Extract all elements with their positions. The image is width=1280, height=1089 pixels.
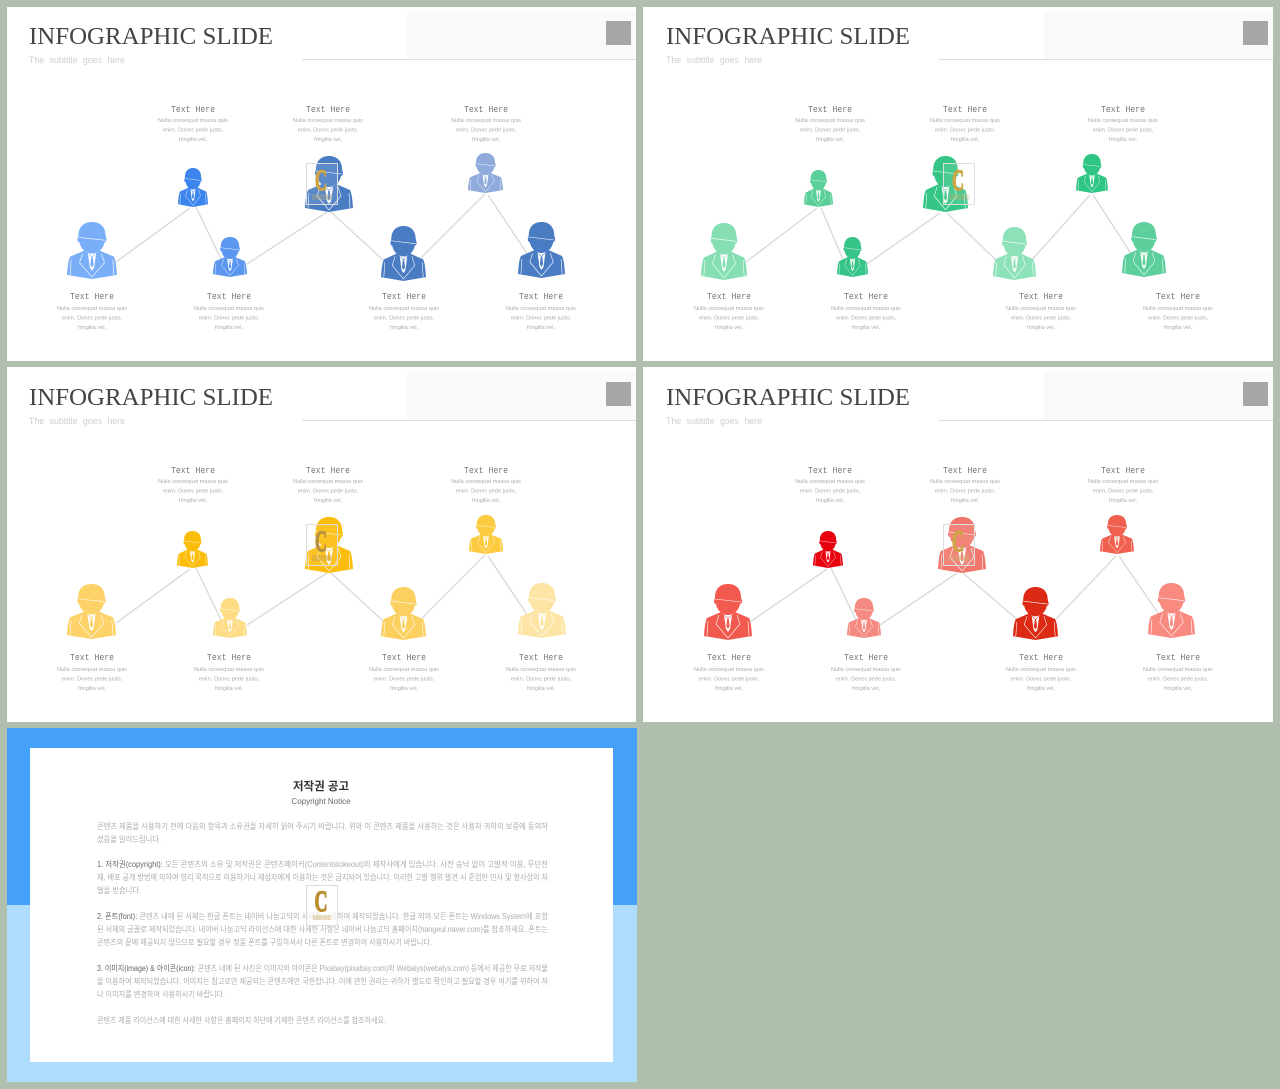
slide 1 labels: Nulla consequat massa quis <box>451 118 521 124</box>
slide 2 labels: fringilla vel, <box>816 137 844 143</box>
copyright heading <box>291 779 351 806</box>
slide 3 labels: Nulla consequat massa quis <box>293 479 363 485</box>
slide 1 header <box>29 11 636 65</box>
slide 1 labels: Text Here <box>207 291 251 302</box>
slide 2 labels: enim. Donec pede justo, <box>1011 316 1072 322</box>
slide 1 labels: Nulla consequat massa quis <box>506 306 576 312</box>
slide 2 labels: Nulla consequat massa quis <box>1088 118 1158 124</box>
slide 1 labels: fringilla vel, <box>390 325 418 331</box>
slide 3 labels: fringilla vel, <box>390 686 418 692</box>
slide 3 labels: Nulla consequat massa quis <box>451 479 521 485</box>
slide 1 labels: Nulla consequat massa quis <box>194 306 264 312</box>
slide 4 labels: enim. Donec pede justo, <box>699 676 760 682</box>
slide 2 labels: Text Here <box>1101 104 1145 115</box>
slide 2 labels: fringilla vel, <box>1164 325 1192 331</box>
slide 2 labels: enim. Donec pede justo, <box>699 316 760 322</box>
slide 4 labels: Nulla consequat massa quis <box>795 479 865 485</box>
copyright heading: Copyright Notice <box>291 797 351 806</box>
slide 2 person icons <box>701 154 1166 280</box>
slide 4 labels: Nulla consequat massa quis <box>694 667 764 673</box>
slide 3 labels: fringilla vel, <box>78 686 106 692</box>
slide 4 labels: fringilla vel, <box>1109 498 1137 504</box>
slide 4 labels: enim. Donec pede justo, <box>800 488 861 494</box>
slide 2 labels: Text Here <box>943 104 987 115</box>
slide 1 labels: Nulla consequat massa quis <box>293 118 363 124</box>
slide 4 header <box>666 372 1273 426</box>
slide 2 labels: enim. Donec pede justo, <box>800 128 861 134</box>
slide 4 labels: Text Here <box>844 652 888 663</box>
slide 4 labels: fringilla vel, <box>951 498 979 504</box>
copyright body text: 셨음을 알려드립니다. <box>97 834 161 844</box>
slide 3 labels: Text Here <box>70 652 114 663</box>
slide 2 labels <box>694 104 1213 331</box>
slide 3 labels: fringilla vel, <box>215 686 243 692</box>
copyright body text: 콘텐츠의 끝에 제공되지 않으므로 필요할 경우 정품 폰트를 구입하셔서 다른 폰트로 변경하여 사용하시기 바랍니다. <box>97 937 432 947</box>
slide 1 labels <box>57 104 576 331</box>
slide 1 labels: enim. Donec pede justo, <box>199 316 260 322</box>
slide 3 labels: enim. Donec pede justo, <box>456 488 517 494</box>
slide 3 labels <box>57 465 576 692</box>
slide 1 connecting lines <box>116 194 528 264</box>
slide 2 labels: Text Here <box>808 104 852 115</box>
slide 4 labels: Text Here <box>707 652 751 663</box>
slide 1 person icons <box>67 153 565 281</box>
slide 3 labels: Nulla consequat massa quis <box>369 667 439 673</box>
slide 4 header: INFOGRAPHIC SLIDE <box>666 385 910 411</box>
slide 4 labels: Text Here <box>1101 465 1145 476</box>
slide 4 labels: fringilla vel, <box>715 686 743 692</box>
copyright body text: 콘텐츠 제품을 사용하기 전에 다음의 항목과 소유권을 자세히 읽어 주시기 바랍니다. 위와 이 콘텐츠 제품을 사용하는 것은 사용자 귀하의 보증에 동의하 <box>97 821 549 831</box>
slide 2 labels: fringilla vel, <box>1027 325 1055 331</box>
slide 2 labels: enim. Donec pede justo, <box>935 128 996 134</box>
slide 4 connecting lines <box>750 556 1160 625</box>
slide 2 labels: Nulla consequat massa quis <box>930 118 1000 124</box>
slide 3 header <box>29 372 636 426</box>
slide 2 watermark: C <box>952 164 964 197</box>
slide 1 labels: enim. Donec pede justo, <box>511 316 572 322</box>
copyright body text: 벌을 받습니다. <box>97 885 141 895</box>
slide 3 labels: Nulla consequat massa quis <box>57 667 127 673</box>
slide 1 labels: Text Here <box>306 104 350 115</box>
slide 2 labels: Text Here <box>707 291 751 302</box>
slide 3 labels: Nulla consequat massa quis <box>506 667 576 673</box>
slide 4 labels: fringilla vel, <box>816 498 844 504</box>
slide 2 labels: Nulla consequat massa quis <box>1143 306 1213 312</box>
slide 3: yellow network <box>7 367 636 722</box>
slide 4 watermark <box>944 524 974 566</box>
slide 2 labels: fringilla vel, <box>951 137 979 143</box>
slide 3 labels: Text Here <box>306 465 350 476</box>
slide 4: red network <box>643 367 1273 722</box>
slide 4 labels: Nulla consequat massa quis <box>831 667 901 673</box>
slide 1 labels: fringilla vel, <box>527 325 555 331</box>
slide 4 labels: fringilla vel, <box>1027 686 1055 692</box>
slide 4 labels: fringilla vel, <box>1164 686 1192 692</box>
slide 2 labels: fringilla vel, <box>852 325 880 331</box>
slide 3 labels: Text Here <box>382 652 426 663</box>
slide 4 labels: fringilla vel, <box>852 686 880 692</box>
copyright body text: 1. 저작권(copyright): 모든 콘텐츠의 소유 및 저작권은 콘텐츠메이커(Contentstokeout)의 제작사에게 있습니다. 사전 승낙 없이 고발적 이용, 무단전 <box>97 859 548 869</box>
slide 3 labels: Text Here <box>519 652 563 663</box>
copyright body text: 을 이용하여 제작되었습니다. 이미지는 참고로만 제공되는 콘텐츠에만 국한합니다. 이에 관한 권리는 귀하가 별도로 확인하고 필요할 경우 여기를 위하여 저 <box>97 976 548 986</box>
slide 5: copyright notice <box>7 728 637 1082</box>
slide 1 labels: Text Here <box>70 291 114 302</box>
slide 4 labels: Nulla consequat massa quis <box>1143 667 1213 673</box>
slide 4 labels: Text Here <box>808 465 852 476</box>
slide 2 labels: Nulla consequat massa quis <box>831 306 901 312</box>
slide 2 header: INFOGRAPHIC SLIDE <box>666 24 910 50</box>
slide 3 labels: Text Here <box>464 465 508 476</box>
slide 1 watermark <box>306 164 338 204</box>
slide 2 header <box>666 11 1273 65</box>
slide 1 labels: Text Here <box>171 104 215 115</box>
copyright body text: 재, 배포 공개 방법에 의하여 영리 목적으로 이용하거나 제삼자에게 이용하는 것은 금지되어 있습니다. 이러한 고발 행위 발견 시 준엄한 민사 및 형사상의 처 <box>97 872 548 882</box>
slide 3 labels: enim. Donec pede justo, <box>511 676 572 682</box>
slide 4 labels: Nulla consequat massa quis <box>1006 667 1076 673</box>
slide 3 labels: Nulla consequat massa quis <box>194 667 264 673</box>
slide 4 labels: Text Here <box>1156 652 1200 663</box>
slide 3 watermark: C <box>315 525 327 558</box>
slide 2 connecting lines <box>746 195 1132 264</box>
slide 3 labels: Text Here <box>207 652 251 663</box>
slide 2 labels: Text Here <box>1019 291 1063 302</box>
slide 1 labels: Text Here <box>382 291 426 302</box>
copyright body text: 콘텐츠 제품 라이선스에 대한 사세한 사항은 홈페이지 하단에 기재한 콘텐츠 라이선스를 참조하세요. <box>97 1015 386 1025</box>
copyright body text: 2. 폰트(font): 콘텐츠 내에 된 서체는 한글 폰트는 네이버 나눔고딕의 서체를 사용하여 제작되었습니다. 한글 외의 모든 폰트는 Windows System에 포함 <box>97 911 549 921</box>
slide 2 labels: Text Here <box>1156 291 1200 302</box>
slide 3 labels: enim. Donec pede justo, <box>374 676 435 682</box>
slide 1 labels: enim. Donec pede justo, <box>298 128 359 134</box>
slide 2 watermark <box>944 164 974 204</box>
slide 1 labels: fringilla vel, <box>314 137 342 143</box>
slide 4 labels: enim. Donec pede justo, <box>1093 488 1154 494</box>
slide 2 labels: fringilla vel, <box>1109 137 1137 143</box>
slide 1 labels: enim. Donec pede justo, <box>163 128 224 134</box>
slide 4 labels: enim. Donec pede justo, <box>935 488 996 494</box>
slide 3 labels: fringilla vel, <box>179 498 207 504</box>
slide 3 header: INFOGRAPHIC SLIDE <box>29 385 273 411</box>
slide 1 labels: Nulla consequat massa quis <box>158 118 228 124</box>
slide 2 header: The subtitle goes here <box>666 55 762 65</box>
slide 1 header: INFOGRAPHIC SLIDE <box>29 24 273 50</box>
slide 1 labels: Nulla consequat massa quis <box>57 306 127 312</box>
slide 2 labels: Text Here <box>844 291 888 302</box>
slide 3 header: The subtitle goes here <box>29 416 125 426</box>
copyright body text: 나 이미지를 변경하여 사용하시기 바랍니다. <box>97 989 225 999</box>
slide 4 watermark: C <box>952 525 964 558</box>
slide 4 labels: enim. Donec pede justo, <box>1148 676 1209 682</box>
slide 3 labels: fringilla vel, <box>472 498 500 504</box>
slide 1 labels: enim. Donec pede justo, <box>456 128 517 134</box>
slide 1 watermark: C <box>315 164 327 197</box>
slide 1 labels: fringilla vel, <box>215 325 243 331</box>
slide 1 labels: enim. Donec pede justo, <box>62 316 123 322</box>
slide 2: green network <box>643 7 1273 361</box>
slide 4 labels: Text Here <box>1019 652 1063 663</box>
slide 2 labels: enim. Donec pede justo, <box>1093 128 1154 134</box>
slide 3 watermark <box>306 524 338 566</box>
slide 3 person icons <box>67 515 566 640</box>
slide 3 labels: Nulla consequat massa quis <box>158 479 228 485</box>
slide 1 labels: enim. Donec pede justo, <box>374 316 435 322</box>
slide 1 header: The subtitle goes here <box>29 55 125 65</box>
slide 2 labels: Nulla consequat massa quis <box>1006 306 1076 312</box>
slide 1 labels: Nulla consequat massa quis <box>369 306 439 312</box>
slide 4 labels: Nulla consequat massa quis <box>930 479 1000 485</box>
slide 4 labels: enim. Donec pede justo, <box>1011 676 1072 682</box>
slide 3 labels: fringilla vel, <box>527 686 555 692</box>
slide 1 labels: fringilla vel, <box>179 137 207 143</box>
slide 1 labels: Text Here <box>464 104 508 115</box>
slide 4 labels: Nulla consequat massa quis <box>1088 479 1158 485</box>
slide 3 connecting lines <box>116 555 528 625</box>
copyright body text: 3. 이미지(image) & 아이콘(icon): 콘텐츠 내에 된 사진은 이미지와 아이콘은 Pixabay(pixabay.com)와 Webalys(webalys.com) 등에서 제공한 무료 저작물 <box>97 963 548 973</box>
slide 3 labels: Text Here <box>171 465 215 476</box>
slide 2 labels: enim. Donec pede justo, <box>1148 316 1209 322</box>
copyright body text <box>97 821 549 1025</box>
slide 4 labels: enim. Donec pede justo, <box>836 676 897 682</box>
slide 1 labels: fringilla vel, <box>78 325 106 331</box>
slide 3 labels: enim. Donec pede justo, <box>62 676 123 682</box>
slide 2 labels: Nulla consequat massa quis <box>694 306 764 312</box>
copyright body text: 된 서체의 글꼴로 제작되었습니다. 네이버 나눔고딕 라이선스에 대한 사세한 사항은 네이버 나눔고딕 홈페이지(hangeul.naver.com)를 참조하세요. 폰트는 <box>97 924 548 934</box>
slide 5 watermark: C <box>314 885 328 918</box>
slide 3 labels: enim. Donec pede justo, <box>199 676 260 682</box>
slide 4 labels: Text Here <box>943 465 987 476</box>
slide 4 labels <box>694 465 1213 692</box>
slide 5 watermark <box>306 885 338 926</box>
slide 2 labels: fringilla vel, <box>715 325 743 331</box>
slide 3 labels: fringilla vel, <box>314 498 342 504</box>
slide 3 labels: enim. Donec pede justo, <box>298 488 359 494</box>
slide 4 header: The subtitle goes here <box>666 416 762 426</box>
copyright heading: 저작권 공고 <box>293 779 349 793</box>
slide 1 labels: fringilla vel, <box>472 137 500 143</box>
slide 2 labels: enim. Donec pede justo, <box>836 316 897 322</box>
slide 2 labels: Nulla consequat massa quis <box>795 118 865 124</box>
slide 1: blue network <box>7 7 636 361</box>
slide 3 labels: enim. Donec pede justo, <box>163 488 224 494</box>
slide 1 labels: Text Here <box>519 291 563 302</box>
slide 4 person icons <box>704 515 1195 640</box>
